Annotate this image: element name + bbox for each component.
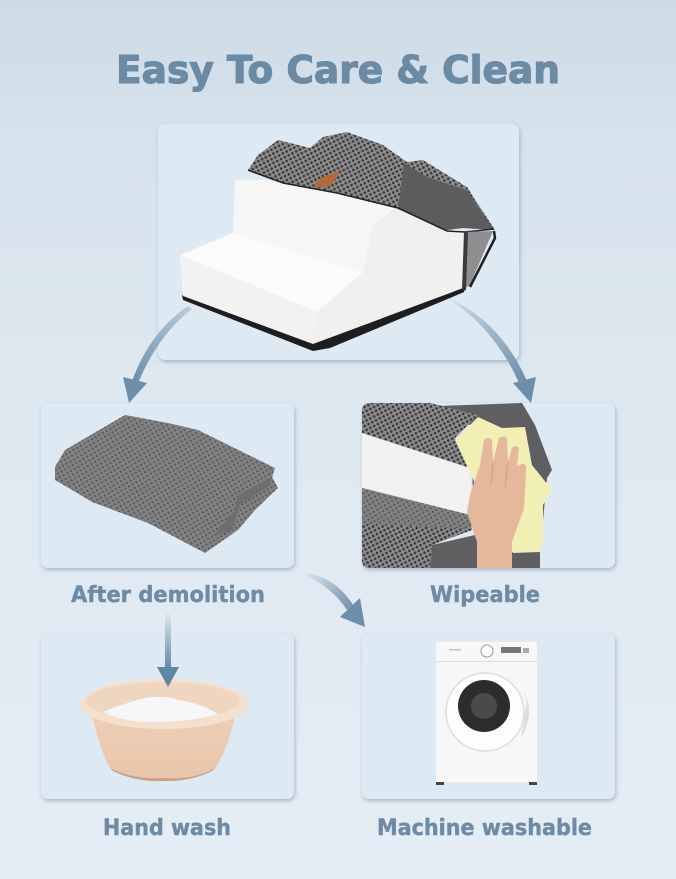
arrow: after demolition to machine washable bbox=[302, 573, 365, 627]
label: after demolition: After demolition bbox=[71, 583, 265, 608]
photo: foam steps bbox=[180, 132, 495, 351]
panel: foam stairs with cover bbox=[158, 124, 519, 360]
photo: hand wiping with cloth bbox=[362, 403, 552, 568]
arrow: stairs to after demolition bbox=[123, 306, 192, 403]
panel: after demolition bbox=[41, 403, 294, 568]
label: wipeable: Wipeable bbox=[430, 583, 540, 608]
panel: machine washable bbox=[362, 633, 615, 799]
title: Easy To Care & Clean bbox=[116, 48, 560, 92]
photo: washing machine bbox=[436, 642, 537, 785]
side pocket bbox=[465, 231, 493, 288]
label: machine washable: Machine washable bbox=[377, 816, 592, 841]
yellow cloth bbox=[455, 417, 552, 553]
cover gathered on top bbox=[248, 132, 495, 290]
panel: hand wash bbox=[41, 633, 294, 799]
panel: wipeable bbox=[362, 403, 615, 568]
leather tag bbox=[312, 172, 340, 188]
photo: folded mesh cover bbox=[55, 415, 278, 553]
hand bbox=[467, 436, 526, 568]
label: hand wash: Hand wash bbox=[103, 816, 231, 841]
arrow: after demolition to hand wash bbox=[157, 613, 179, 687]
photo: wash basin bbox=[80, 679, 248, 781]
arrow: stairs to wipeable bbox=[447, 298, 536, 403]
